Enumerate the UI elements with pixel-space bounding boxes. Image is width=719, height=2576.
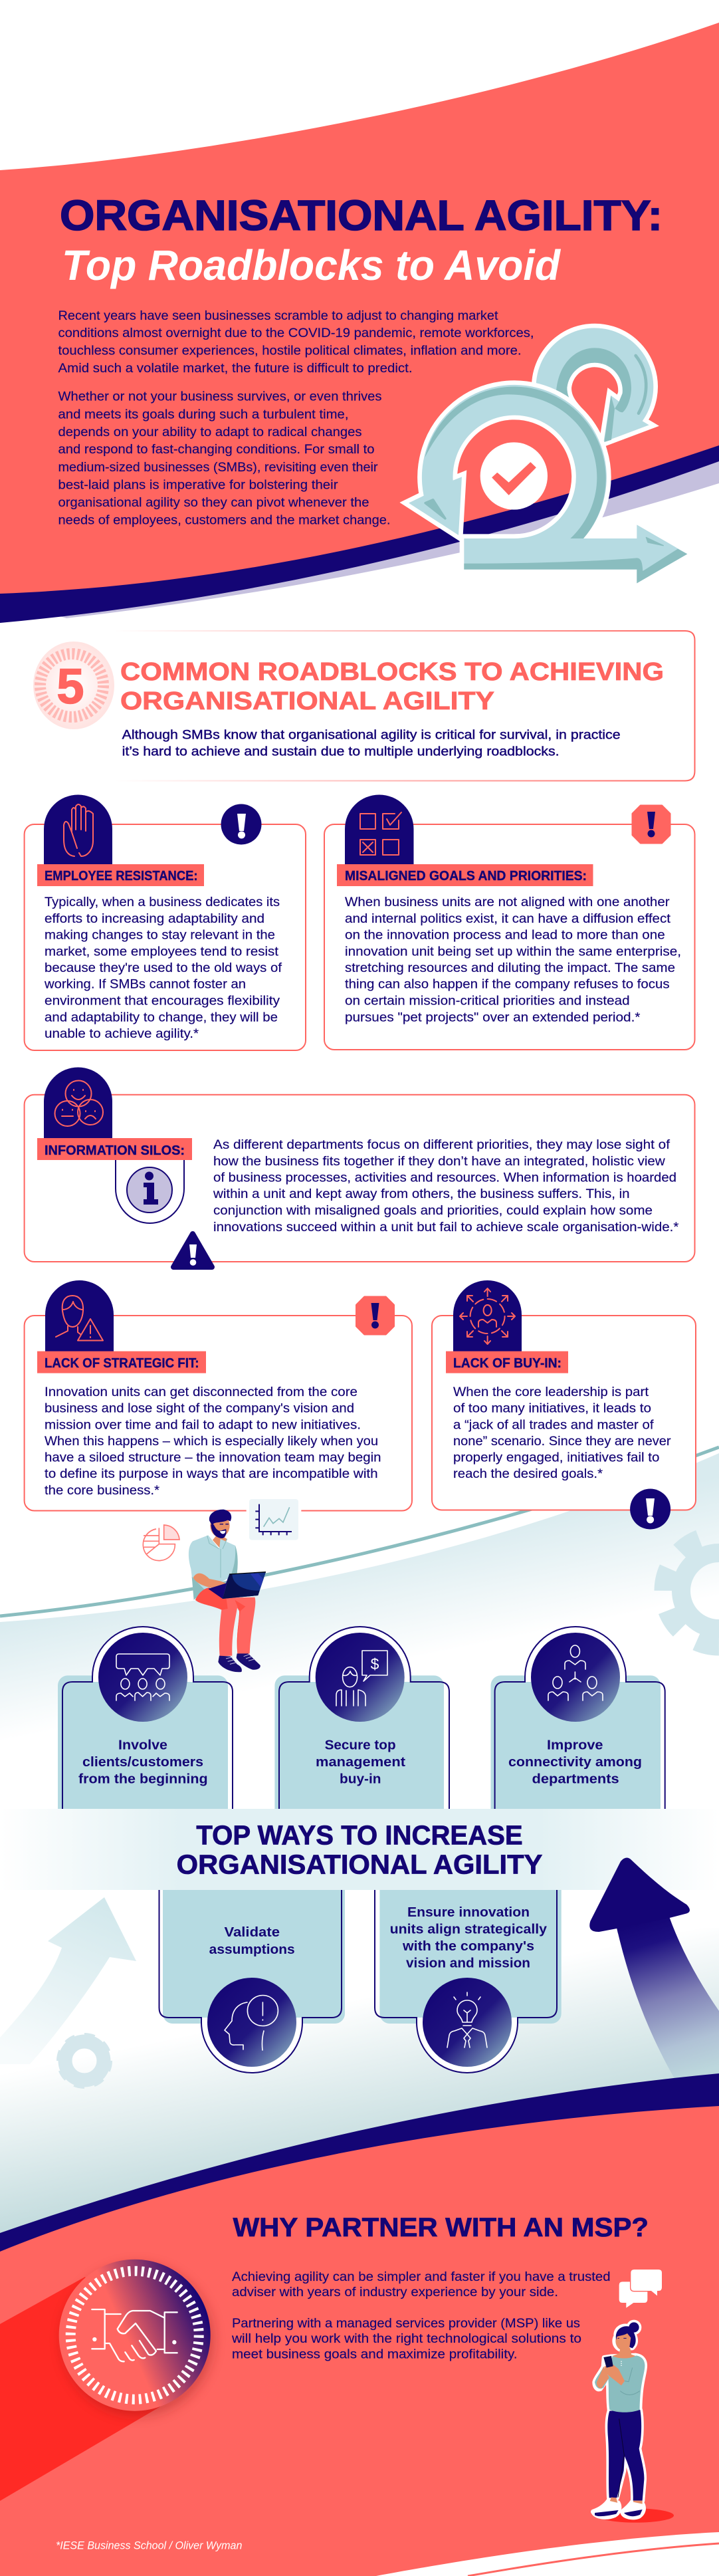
body text: how the business fits together if they don’t have an integrated, holistic view [213,1154,666,1169]
body text: innovation unit being set up within the same enterprise, [345,944,681,959]
body text [345,895,681,1024]
intro text: touchless consumer experiences, hostile political climates, inflation and more. [58,343,522,358]
intro text: depends on your ability to adapt to radical changes [58,425,362,439]
intro text: Recent years have seen businesses scramble to adjust to changing market [58,308,498,323]
illustration: woman with phone and speech bubbles [593,2270,674,2523]
msp body text: will help you work with the right technological solutions to [231,2331,581,2346]
header coral background [0,23,719,623]
body text: properly engaged, initiatives fail to [453,1450,660,1464]
card text: Validate [225,1925,280,1940]
body text: pursues "pet projects" over an extended period.* [345,1010,641,1024]
panel: lack of buy-in [432,1280,696,1529]
body text: none” scenario. Since they are never [453,1434,671,1449]
intro text: needs of employees, customers and the market change. [58,513,391,528]
card text [390,1905,548,1971]
icon: agile loop arrow [409,328,687,583]
body text: a “jack of all trades and master of [453,1417,654,1432]
intro text: and meets its goals during such a turbulent time, [58,407,348,421]
panel: lack of strategic fit [25,1280,412,1510]
icon: team hierarchy [531,1633,620,1722]
panel: involve clients [58,1627,233,1835]
intro text: best-laid plans is imperative for bolstering their [58,477,338,492]
body text: working. If SMBs cannot foster an [44,977,246,992]
banner: top ways to increase agility: ORGANISATIONAL AGILITY [177,1849,542,1879]
icon: speech bubbles [619,2270,662,2308]
body text: making changes to stay relevant in the [45,928,275,943]
banner: top ways to increase agility: TOP WAYS TO INCREASE [196,1820,523,1851]
panel: information silos [25,1068,695,1267]
heading: ORGANISATIONAL AGILITY [120,687,494,715]
figure [593,2322,645,2517]
body text: reach the desired goals.* [453,1466,603,1481]
msp body text: Partnering with a managed services provider (MSP) like us [232,2316,580,2331]
alert badge [173,1234,212,1267]
icon dome: checkboxes [345,795,413,864]
body text: on certain mission-critical priorities and instead [345,993,630,1008]
label: employee resistance: EMPLOYEE RESISTANCE: [45,869,198,883]
icon: handshake medallion [0,2260,213,2501]
body text: and internal politics exist, it can have a diffusion effect [345,911,671,926]
label: lack of buy-in: LACK OF BUY-IN: [453,1356,562,1371]
decorative left arrow [0,1897,136,2064]
card text: vision and mission [406,1956,530,1971]
icon: pie chart [143,1525,179,1561]
icon: executive with dollar: $ [371,1655,379,1673]
icon dome: person with warning [45,1280,114,1351]
label: misaligned goals: MISALIGNED GOALS AND PRIORITIES: [345,869,587,883]
panel: five common roadblocks header [33,631,695,780]
card text [508,1738,642,1787]
icon: number five badge [33,642,114,729]
icon: information badge [116,1160,184,1223]
chart card [247,1499,301,1540]
panel: ensure innovation alignment [375,1861,562,2073]
body text: As different departments focus on different priorities, they may lose sight of [213,1137,670,1152]
panel: validate assumptions [159,1861,345,2073]
msp body text: Achieving agility can be simpler and faster if you have a trusted [232,2270,611,2284]
intro text: Amid such a volatile market, the future is difficult to predict. [58,361,412,376]
decorative gear left [60,2036,109,2085]
body text: of too many initiatives, it leads to [453,1401,651,1416]
body text [45,1385,381,1498]
intro sentence: Although SMBs know that organisational agility is critical for survival, in practice [122,728,621,743]
panel: misaligned goals and priorities [324,795,695,1050]
title [60,191,663,289]
icon dome: faces [44,1068,112,1138]
body text: When business units are not aligned with one another [345,895,670,909]
body text: within a unit and kept away from others, the business suffers. This, in [213,1187,630,1201]
icon: group conversation [98,1633,187,1722]
card text [316,1738,405,1787]
card text: units align strategically [390,1923,548,1937]
body text: thing can also happen if the company refuses to focus [345,977,670,992]
card text [209,1925,295,1957]
figure outline [593,2322,645,2517]
body text: unable to achieve agility.* [45,1026,199,1041]
body text [453,1385,671,1481]
label: lack of strategic fit [37,1351,206,1373]
intro text: conditions almost overnight due to the COVID-19 pandemic, remote workforces, [58,326,534,340]
body text: efforts to increasing adaptability and [45,911,264,926]
body text: stretching resources and diluting the impact. The same [345,961,675,975]
body text: Typically, when a business dedicates its [45,895,280,909]
illustration: man with laptop and charts [143,1499,301,1672]
msp body text [231,2270,611,2361]
card text: connectivity among [508,1755,642,1770]
footer coral background [0,2073,719,2576]
title: ORGANISATIONAL AGILITY: [60,191,663,239]
banner: top ways to increase agility [0,1809,719,1890]
intro text: medium-sized businesses (SMBs), revisiting even their [58,460,378,475]
body text: environment that encourages flexibility [45,993,280,1008]
body text: have a siloed structure – the innovation team may begin [45,1450,381,1464]
decorative gear right [663,1535,719,1647]
body text: mission over time and fail to adapt to new initiatives. [45,1417,361,1432]
heading [120,658,664,715]
panel: employee resistance [25,795,306,1050]
card text: Involve [118,1738,167,1753]
heading: COMMON ROADBLOCKS TO ACHIEVING [120,658,664,686]
lower section pale background [0,1447,719,2260]
source note: *IESE Business School / Oliver Wyman [56,2539,242,2552]
body text [213,1137,679,1234]
title: Top Roadblocks to Avoid [62,241,562,289]
intro text [58,308,534,528]
msp body text: adviser with years of industry experience by your side. [232,2285,558,2299]
man figure [189,1510,266,1672]
card text: assumptions [209,1942,295,1957]
label: lack of strategic fit: LACK OF STRATEGIC FIT: [45,1356,199,1371]
header frame [114,631,695,780]
panel: secure management buy-in [274,1627,449,1835]
body text: on the innovation process and lead to more than one [345,928,665,943]
heading: why partner with an msp: WHY PARTNER WITH AN MSP? [233,2213,649,2242]
card text: from the beginning [78,1772,208,1787]
body text: to define its purpose in ways that are incompatible with [45,1466,378,1481]
alert badge [356,1297,393,1334]
icon dome: hand [44,795,112,864]
card text: Improve [547,1738,603,1753]
body text: because they're used to the old ways of [45,961,282,975]
intro text: and respond to fast-changing conditions. For small to [58,442,375,457]
intro sentence: it’s hard to achieve and sustain due to multiple underlying roadblocks. [122,745,560,759]
msp body text: meet business goals and maximize profitability. [232,2347,517,2361]
body text: market, some employees tend to resist [45,944,279,959]
icon: head with alert [207,1978,296,2067]
card text: clients/customers [82,1755,203,1770]
panel: improve connectivity [490,1627,665,1835]
label: information silos: INFORMATION SILOS: [45,1143,185,1158]
card text: departments [532,1772,619,1787]
label: misaligned goals [337,864,593,886]
card text: Secure top [325,1738,396,1753]
intro text: Whether or not your business survives, or even thrives [58,390,382,404]
intro sentence [122,728,621,759]
intro text: organisational agility so they can pivot whenever the [58,495,369,510]
card text: buy-in [340,1772,381,1787]
alert badge [630,1489,670,1529]
alert badge [633,806,670,843]
card text: Ensure innovation [407,1905,530,1920]
body text: When this happens – which is especially likely when you [45,1434,378,1449]
icon: idea bulb person [423,1978,512,2067]
card text: with the company's [402,1939,534,1954]
alert badge [221,804,262,844]
card text [78,1738,208,1787]
icon: executive with dollar [316,1633,405,1722]
icon dome: network of arrows [453,1280,522,1351]
body text: innovations succeed within a unit but fail to achieve scale organisation-wide.* [213,1220,679,1234]
body text: of business processes, activities and resources. When information is hoarded [213,1171,676,1185]
label: lack of buy-in [446,1351,568,1373]
label: information silos [37,1138,192,1160]
icon: large rising arrow [589,1858,719,2079]
body text: and adaptability to change, they will be [45,1010,278,1024]
card text: management [316,1755,405,1770]
body text: conjunction with misaligned goals and priorities, could explain how some [213,1203,653,1218]
label: employee resistance [37,864,204,886]
body text: the core business.* [45,1483,159,1498]
body text: business and lose sight of the company's vision and [45,1401,354,1416]
body text: When the core leadership is part [453,1385,649,1399]
icon: number five badge: 5 [56,659,84,714]
body text [44,895,282,1041]
body text: Innovation units can get disconnected from the core [45,1385,358,1399]
